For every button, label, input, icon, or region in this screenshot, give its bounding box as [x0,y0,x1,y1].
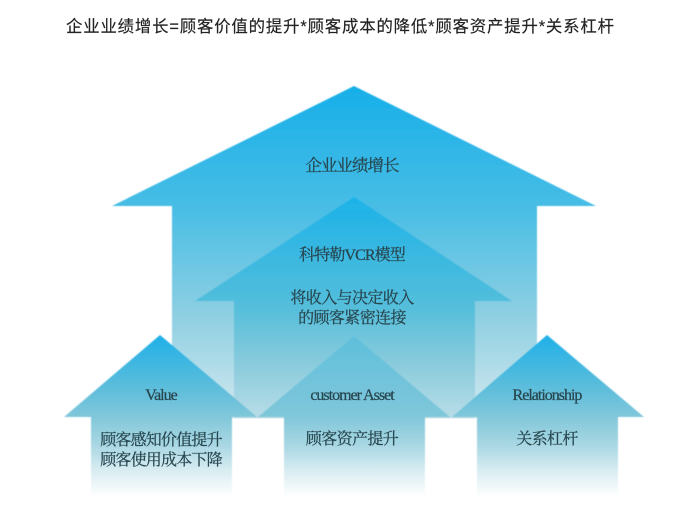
arrow: customer Asset [258,336,450,497]
arrow: Value [64,335,257,497]
text: perceived value up: 顾客感知价值提升 [100,430,223,449]
text: relationship leverage: 关系杠杆 [516,430,578,448]
label: company performance growth: 企业业绩增长 [306,156,399,175]
arrow: VCR model [195,197,512,418]
label: Value: Value [145,387,178,404]
text: usage cost down: 顾客使用成本下降 [100,451,223,469]
title: 企业业绩增长=顾客价值的提升*顾客成本的降低*顾客资产提升*关系杠杆 [66,18,614,36]
arrow: Relationship [452,335,644,497]
label: VCR model: 科特勒VCR模型 [299,245,406,264]
text: customer asset up: 顾客资产提升 [306,429,399,448]
label: Relationship: Relationship [513,387,582,404]
text: second line: 的顾客紧密连接 [298,309,407,327]
text: connect revenue with customers: 将收入与决定收入 [290,289,414,307]
label: customer Asset: customer Asset [310,387,395,404]
